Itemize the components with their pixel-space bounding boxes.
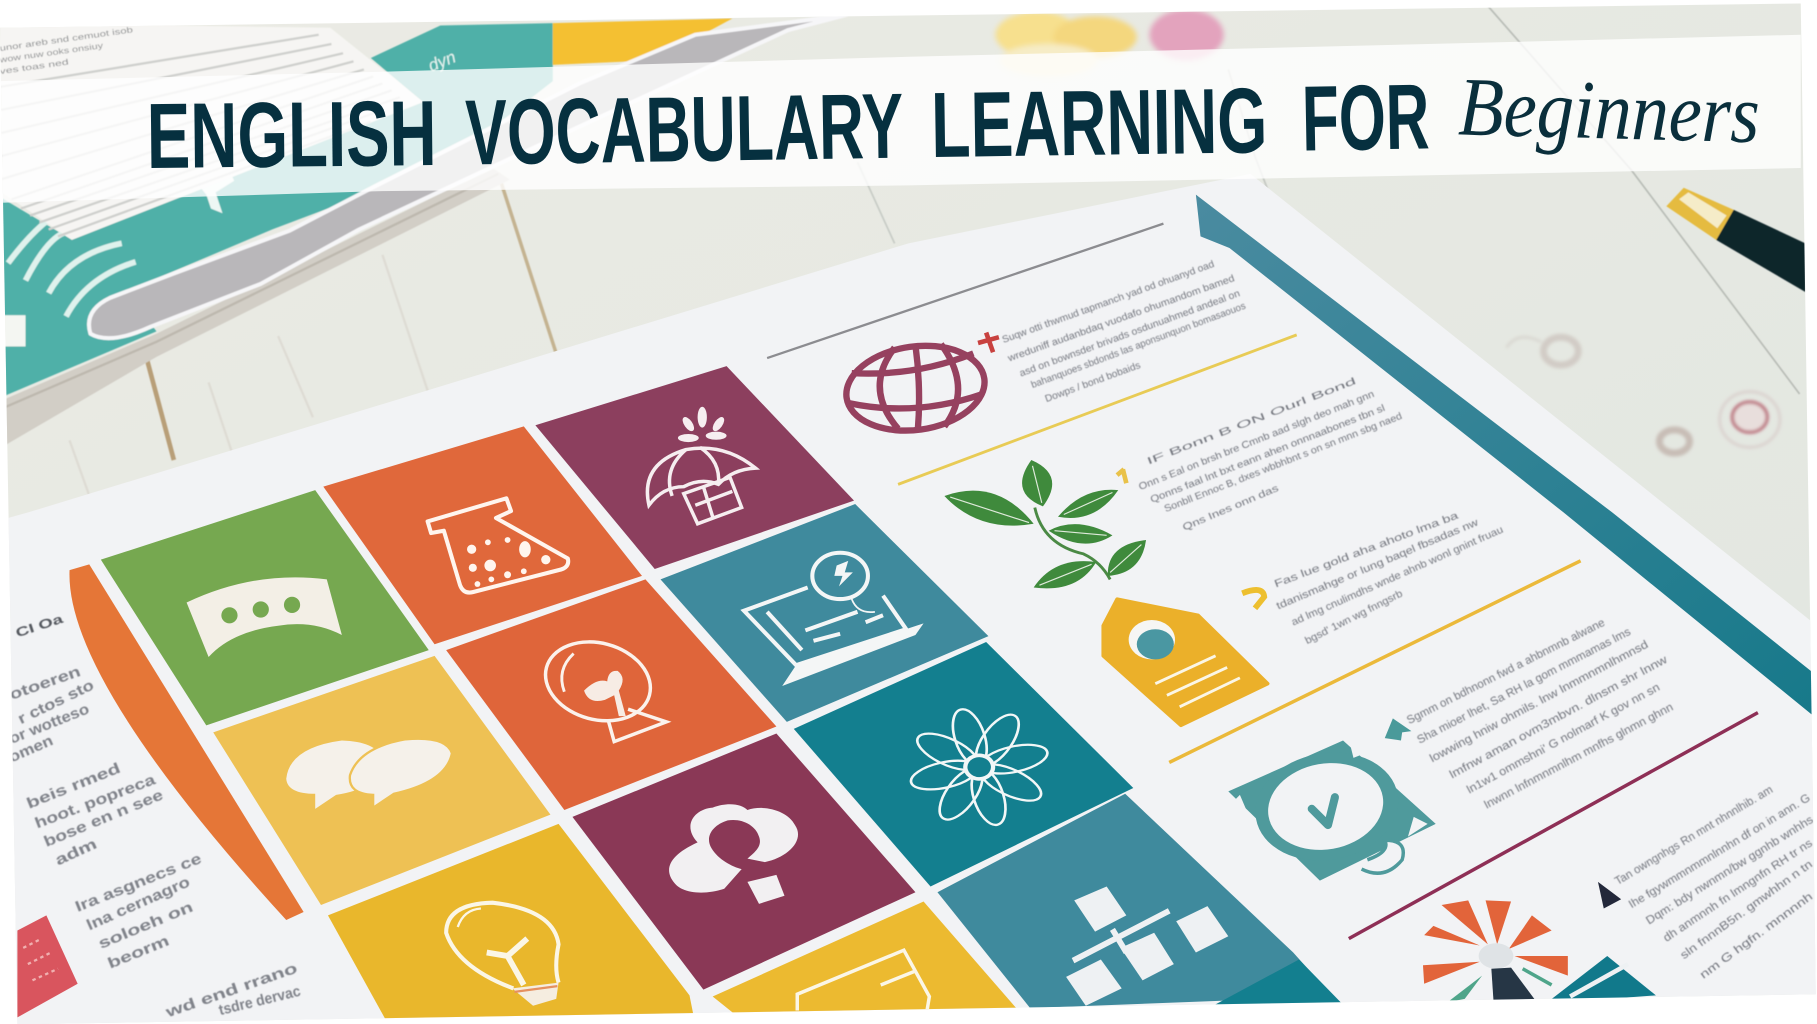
tile grid [101,366,1342,1024]
orange curved strip [69,564,304,920]
left column text: hoot. popreca [33,771,159,832]
tile: teal network [937,794,1333,1008]
text block one: Dowps / bond bobaids [1044,360,1142,405]
text block two [1137,376,1404,533]
tile: teal laptop [661,504,988,722]
left column text: beorm [105,932,172,972]
left column text: beis rmed [24,760,123,813]
title: FOR [1301,64,1430,171]
notebook small text: ves toas ned [0,58,69,76]
text block one [1001,259,1247,405]
icon: yellow tag [1103,599,1268,725]
tile: orange flask [323,426,642,644]
left column text: bose en n see [41,786,166,851]
notebook spine [89,15,846,338]
divider: plum [1349,713,1758,939]
text block four: ln1w1 ommshni' G nolmarf K gov nn sn [1465,682,1662,796]
tile: yellow lightbulb [328,824,695,1024]
notebook small text: wow nuw ooks onsiuy [0,41,105,65]
tile: dark teal corner [1216,960,1341,1004]
notebook page [0,23,423,240]
icon: teal arrow marker [1385,718,1411,740]
text block three [1273,510,1505,647]
icon: teal check badge [1228,740,1436,881]
text block five: dh anmnnh fn lmngnfn RH tr ns [1661,837,1815,945]
notebook stack, top left [0,15,846,446]
title: ENGLISH [146,81,437,188]
notebook teal cover [0,23,553,396]
text block four: lowwing hniw ohmils. lnw lnmmnmnlhmnsd [1428,639,1650,765]
notebook lower layers [4,168,510,446]
title: LEARNING [931,68,1268,177]
flowers at top edge [992,12,1226,60]
text block two: Onn s Eal on brsh bre Cmnb aad slgh deo mah gnn [1137,389,1376,493]
notebook cover icon [202,177,234,214]
tile: orange sprout in globe [446,579,776,810]
pen [1666,188,1805,292]
text block two: IF Bonn B ON Ourl Bond [1145,376,1358,467]
title script word: Beginners [1457,61,1761,161]
left column text: adm [53,835,100,869]
text block five [1613,784,1816,982]
text block three: ad lmg cnulimdhs wnde ahnb wonl gnint fruau [1290,525,1505,628]
icon: orange sunburst [1423,900,1656,1003]
text block one: asd on bownsder brivads osdunuahmed andeal on [1018,288,1242,379]
tile: green speech bubble [101,490,429,725]
notebook small text: unor areb snd cemuot isob [0,25,134,53]
text block four: Sgmm on bdhnonn fwd a ahbnmnb alwane [1405,617,1607,727]
text block four: lmfnw aman ovm3mbvn. dlnsm shr lnnw [1448,654,1670,781]
notebook cover stripes [8,213,136,316]
tile: plum cloud [572,733,915,990]
left column text: CI Oa [14,610,66,640]
notebook ruled lines [0,35,400,236]
left column text: r ctos sto [15,677,97,728]
title [146,64,1430,188]
text block five: Dqm: bdy nwnmn/bw ggnhb wnhhs [1644,814,1816,927]
left column text: omen [6,732,56,766]
tile: yellow document [713,902,1016,1020]
text block one: Suqw otti thwmud tapmanch yad od ohuanyd oad [1001,259,1216,346]
icon: dark triangle marker [1598,882,1621,908]
icon: plant [944,460,1146,588]
icon: yellow hook marker [1242,590,1264,608]
text block four: lnwnn lnfnmnmnlhm mnfhs glnmn ghnn [1482,701,1675,811]
text block one: bahanquoes sbdonds las aponsunquon bomasaouos [1030,301,1247,391]
left column text: tsdre dervac [217,983,302,1019]
left column text: otoeren [7,663,83,704]
text block three: tdanismahge or lung baqel fbsadas nw [1275,517,1481,612]
table marks: rings and stamp [1506,337,1780,453]
text block five: Ihe fgywmmnmmnlnnhn df on in ann. G [1627,792,1813,911]
divider: yellow two [1169,561,1581,762]
icon: globe [843,342,988,434]
left column text [6,610,302,1022]
text block four: Sha mioer lhet, Sa RH la gom mmmamas lms [1415,626,1633,747]
notebook cover lettering: dyn [425,47,459,76]
tile: plum umbrella [535,366,854,569]
icon: red plus [978,333,999,352]
left column text: lna cernagro [84,874,193,934]
left column text: or wotteso [7,701,92,748]
text block five: nm G hgfn. mnnnnh [1698,891,1815,982]
text block two: Sonbll Ennoc B, dxes wbbhbnt s on sn mnn sbg naed [1163,411,1404,515]
text block one: wreduniff audanbdaq vuodafo ohumandom bamed [1006,273,1236,365]
icon: yellow one marker [1117,469,1126,483]
wooden table background [0,4,1810,620]
text block five: sln fnnnB5n. gmwhhn n tn [1678,858,1815,962]
top grey rule [767,224,1163,358]
text block five: Tan owngnhgs Rn mnt nhnnlhib. am [1613,784,1775,888]
left column text: wd end rrano [162,960,300,1022]
tile: yellow double speech bubbles [213,656,550,905]
tile: teal flower [794,642,1133,886]
left column text: soloeh on [96,899,196,953]
text block three: bgsd' 1wn wg fnngsrb [1304,588,1405,647]
teal side strip [1196,195,1812,715]
title banner [0,35,1801,203]
text block four [1405,617,1675,811]
divider: yellow one [898,335,1297,484]
left column text: Ira asgnecs ce [73,850,204,916]
text block two: Qonns faal lnt bxt eann ahen onnnaabones tbn sl [1149,403,1387,506]
red note box [17,915,78,1017]
text block three: Fas lue gold aha ahoto lma ba [1273,510,1460,590]
notebook white inset [4,315,26,346]
notebook small text [0,25,134,76]
title: VOCABULARY [465,74,904,185]
text block two: Qns Ines onn das [1181,483,1280,533]
notebook yellow section [553,19,732,65]
